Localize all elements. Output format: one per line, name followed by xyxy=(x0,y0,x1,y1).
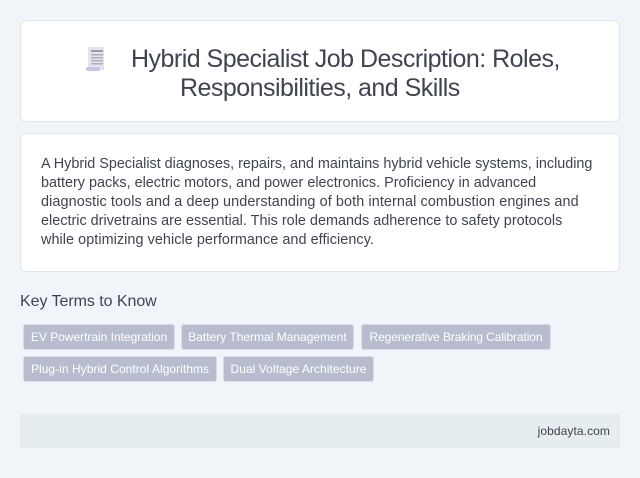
tag: Regenerative Braking Calibration xyxy=(361,324,551,350)
tag: Dual Voltage Architecture xyxy=(223,356,374,382)
text block: description xyxy=(41,156,592,248)
heading: title xyxy=(131,45,560,102)
panel: title card xyxy=(20,20,620,122)
tag: Plug-in Hybrid Control Algorithms: Plug-in Hybrid Control Algorithms xyxy=(31,362,209,376)
tag: Dual Voltage Architecture: Dual Voltage Architecture xyxy=(230,362,366,376)
tag: EV Powertrain Integration xyxy=(23,324,175,350)
text block: description: battery packs, electric motors, and power electronics. Proficiency in advanced xyxy=(41,175,536,191)
tag: Battery Thermal Management: Battery Thermal Management xyxy=(188,330,347,344)
icon: document scroll xyxy=(86,47,104,71)
tag: Regenerative Braking Calibration: Regenerative Braking Calibration xyxy=(370,330,542,344)
tag: EV Powertrain Integration: EV Powertrain Integration xyxy=(31,330,167,344)
heading: title: Hybrid Specialist Job Description: Roles, xyxy=(131,45,560,73)
tag: Battery Thermal Management xyxy=(181,324,354,350)
footer: site name: jobdayta.com xyxy=(538,424,610,438)
panel: description card xyxy=(20,133,620,272)
panel: key term tags xyxy=(23,324,551,382)
text block: description: A Hybrid Specialist diagnoses, repairs, and maintains hybrid vehicle systems, including xyxy=(41,156,592,172)
heading: title: Responsibilities, and Skills xyxy=(180,74,460,102)
tag: Plug-in Hybrid Control Algorithms xyxy=(23,356,217,382)
text block: description: while optimizing vehicle performance and efficiency. xyxy=(41,232,374,248)
footer bar xyxy=(20,414,620,448)
text block: description: diagnostic tools and a deep understanding of both internal combustion engines and xyxy=(41,194,579,210)
heading: key terms: Key Terms to Know xyxy=(20,293,157,310)
text block: description: electric drivetrains are essential. This role demands adherence to safety protocols xyxy=(41,213,562,229)
